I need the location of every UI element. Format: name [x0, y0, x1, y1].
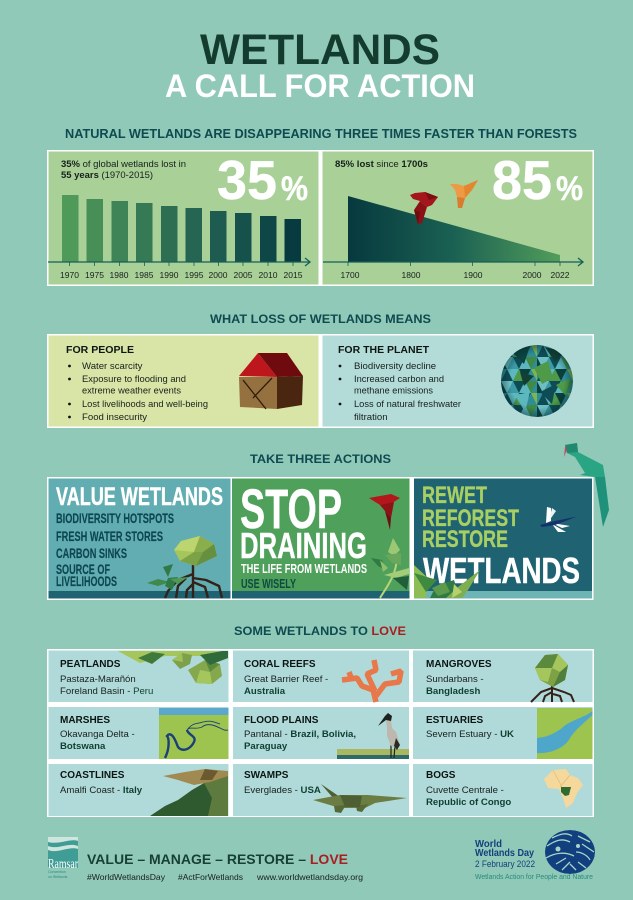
label: peatlands: PEATLANDS: [60, 659, 121, 670]
footer: world wetlands day logo: Wetlands Action for People and Nature: [475, 874, 593, 881]
label: swamps: SWAMPS: [244, 770, 289, 781]
text: 85% lost since 1700s: 85% lost since 1700s: [335, 159, 428, 170]
icon: coral: [342, 660, 401, 702]
heading: for the planet: FOR THE PLANET: [338, 345, 429, 356]
list: consequences for people: Exposure to flooding and: [82, 374, 186, 385]
icon: red origami bird: [410, 192, 438, 224]
label: mangroves: Sundarbans -: [426, 674, 484, 685]
footer: world wetlands day logo: [475, 830, 595, 881]
icon: peatland foliage: [116, 650, 228, 684]
icon: estuary map: [537, 708, 592, 759]
area chart: [323, 196, 583, 280]
footer: ramsar logo: Ramsar: [48, 857, 78, 872]
bar chart: 1980: [110, 270, 129, 280]
label: estuaries: [426, 715, 514, 740]
area chart: 1700: [341, 270, 360, 280]
text: the life from wetlands: THE LIFE FROM WETLANDS: [241, 562, 367, 576]
heading: stop draining: DRAINING: [240, 525, 367, 566]
label: peatlands: Foreland Basin - Peru: [60, 686, 153, 697]
list: value of wetlands: BIODIVERSITY HOTSPOTS: [56, 511, 174, 526]
footer: ramsar logo: [48, 837, 78, 879]
label: swamps: Everglades - USA: [244, 785, 321, 796]
cell: peatlands: [48, 650, 228, 702]
bar chart: 2010: [259, 270, 278, 280]
list: value of wetlands: FRESH WATER STORES: [56, 529, 163, 544]
label: flood plains: [244, 715, 356, 752]
list: consequences for people: Water scarcity: [82, 361, 143, 372]
icon: wetlands globe emblem: [545, 830, 595, 874]
list: consequences for people: extreme weather events: [82, 386, 181, 396]
heading: rewet reforest restore: [422, 482, 519, 553]
footer: hashtags and website: [87, 872, 363, 882]
bar chart: 2015: [284, 270, 303, 280]
icon: faceted globe: [501, 345, 573, 417]
text: 35% of global wetlands lost: 35% of global wetlands lost in: [61, 159, 186, 170]
label: coral reefs: [244, 659, 328, 697]
title: [165, 26, 475, 104]
bar chart: 2005: [234, 270, 253, 280]
panel: stop draining: [232, 477, 410, 598]
title: WETLANDS: [200, 26, 440, 74]
bar chart: 1990: [160, 270, 179, 280]
icon: green parrot: [564, 443, 609, 527]
text: use wisely: USE WISELY: [241, 577, 296, 591]
label: bogs: BOGS: [426, 770, 456, 781]
area chart: 1800: [402, 270, 421, 280]
label: bogs: Republic of Congo: [426, 797, 511, 808]
heading: for people: FOR PEOPLE: [66, 345, 134, 356]
panel: rewet reforest restore: [414, 478, 592, 598]
panel: 85% area chart: [322, 149, 592, 284]
icon: orange origami bird: [450, 180, 478, 208]
list: consequences for the planet: Biodiversity decline: [354, 361, 436, 372]
label: marshes: Botswana: [60, 741, 106, 752]
panel: wetland types grid: [47, 649, 594, 817]
label: coral reefs: CORAL REEFS: [244, 659, 316, 670]
cell: coral reefs: [233, 650, 409, 702]
label: mangroves: [426, 659, 492, 697]
bar chart: 2000: [209, 270, 228, 280]
label: mangroves: MANGROVES: [426, 659, 492, 670]
list: consequences for people: Lost livelihoods and well-being: [82, 399, 208, 410]
list: consequences for people: Food insecurity: [82, 412, 147, 423]
footer: world wetlands day logo: 2 February 2022: [475, 859, 535, 869]
label: coastlines: COASTLINES: [60, 770, 125, 781]
icon: river map: [159, 708, 228, 759]
list: consequences for the planet: filtration: [354, 412, 388, 423]
icon: mangrove tree: [531, 654, 574, 702]
big number 85%: %: [556, 170, 583, 208]
list: consequences for the planet: methane emissions: [354, 386, 433, 396]
label: coastlines: [60, 770, 143, 796]
area chart: 2000: [523, 270, 542, 280]
label: bogs: Cuvette Centrale -: [426, 785, 504, 796]
footer: hashtags and website: #WorldWetlandsDay: [87, 872, 166, 882]
list: consequences for the planet: Increased carbon and: [354, 374, 444, 385]
heading: take three actions: TAKE THREE ACTIONS: [250, 452, 391, 466]
text: 35% of global wetlands lost: 55 years (1970-2015): [61, 170, 153, 181]
cell: marshes: [48, 707, 228, 759]
big number 35%: [217, 149, 308, 211]
bar chart: 1975: [85, 270, 104, 280]
footer: world wetlands day logo: Wetlands Day: [475, 848, 534, 859]
label: peatlands: [60, 659, 153, 697]
icon: foliage: [414, 565, 480, 598]
cell: flood plains: [233, 707, 409, 759]
list: consequences for the planet: Loss of natural freshwater: [354, 399, 462, 410]
cell: swamps: [233, 764, 409, 816]
heading: rewet reforest restore: REFOREST: [422, 505, 519, 532]
panel: three actions: [47, 477, 594, 600]
footer: slogan: VALUE – MANAGE – RESTORE – LOVE: [87, 851, 348, 867]
cell: coastlines: [48, 764, 228, 816]
label: coral reefs: Great Barrier Reef -: [244, 674, 328, 685]
list: value of wetlands: CARBON SINKS: [56, 546, 127, 561]
text: 35% of global wetlands lost: [61, 159, 186, 181]
icon: africa map: [544, 769, 583, 808]
panel: value wetlands: [48, 478, 230, 598]
big number 35%: %: [281, 170, 308, 208]
label: coral reefs: Australia: [244, 686, 286, 697]
big number 85%: 85: [492, 149, 552, 211]
heading: disappearing faster than forests: NATURAL WETLANDS ARE DISAPPEARING THREE TIMES FASTER THAN FORESTS: [65, 126, 577, 141]
panel: for the planet: [322, 336, 592, 426]
cell: bogs: [413, 764, 592, 816]
label: marshes: MARSHES: [60, 715, 110, 726]
bar chart: 1985: [135, 270, 154, 280]
icon: green plant: [371, 538, 409, 598]
cell: estuaries: [413, 707, 592, 759]
list: value of wetlands: SOURCE OF: [56, 562, 110, 577]
bar chart: 1995: [185, 270, 204, 280]
icon: crocodile: [313, 784, 407, 813]
list: consequences for people: [68, 361, 208, 423]
footer: ramsar logo: Convention: [48, 870, 66, 874]
title: A CALL FOR ACTION: [165, 68, 475, 104]
area chart: 2022: [551, 270, 570, 280]
label: coastlines: Amalfi Coast - Italy: [60, 785, 143, 796]
icon: cracked house: [239, 353, 303, 409]
heading: value wetlands: VALUE WETLANDS: [56, 483, 223, 511]
label: flood plains: Pantanal - Brazil, Bolivia,: [244, 729, 356, 740]
label: peatlands: Pastaza-Marañón: [60, 674, 136, 685]
icon: coastal cliff: [150, 769, 228, 816]
footer: ramsar logo: on Wetlands: [48, 875, 68, 879]
label: mangroves: Bangladesh: [426, 686, 481, 697]
big number 85%: [492, 149, 583, 211]
icon: stork on ground: [337, 713, 409, 759]
list: value of wetlands: LIVELIHOODS: [56, 574, 117, 589]
label: flood plains: Paraguay: [244, 741, 288, 752]
heading: wetlands: WETLANDS: [423, 550, 580, 591]
heading: stop draining: [240, 477, 367, 566]
label: marshes: [60, 715, 135, 752]
bar chart: 1970: [60, 270, 79, 280]
heading: what loss of wetlands means: WHAT LOSS OF WETLANDS MEANS: [210, 312, 431, 326]
heading: rewet reforest restore: RESTORE: [422, 526, 508, 553]
heading: some wetlands to love: SOME WETLANDS TO LOVE: [234, 624, 406, 638]
label: estuaries: Severn Estuary - UK: [426, 729, 514, 740]
list: consequences for the planet: [339, 361, 462, 423]
panel: loss statistics: [47, 149, 594, 286]
heading: stop draining: STOP: [240, 477, 342, 540]
panel: for people: [48, 336, 318, 426]
cell: mangroves: [413, 650, 592, 702]
bar chart: [48, 195, 310, 280]
label: swamps: [244, 770, 321, 796]
big number 35%: 35: [217, 149, 277, 211]
footer: world wetlands day logo: World: [475, 839, 502, 850]
list: value of wetlands: [56, 511, 174, 589]
label: bogs: [426, 770, 511, 808]
footer: hashtags and website: #ActForWetlands: [178, 872, 243, 882]
label: marshes: Okavanga Delta -: [60, 729, 135, 740]
icon: red origami bird: [369, 494, 400, 530]
icon: dragonfly: [540, 507, 577, 532]
footer: hashtags and website: www.worldwetlandsday.org: [256, 872, 363, 882]
panel: 35% bar chart: [48, 149, 318, 284]
label: flood plains: FLOOD PLAINS: [244, 715, 319, 726]
area chart: 1900: [464, 270, 483, 280]
panel: meaning of loss: [47, 334, 594, 428]
label: estuaries: ESTUARIES: [426, 715, 484, 726]
icon: mangrove tree with leaves: [147, 536, 222, 598]
heading: rewet reforest restore: REWET: [422, 482, 487, 509]
